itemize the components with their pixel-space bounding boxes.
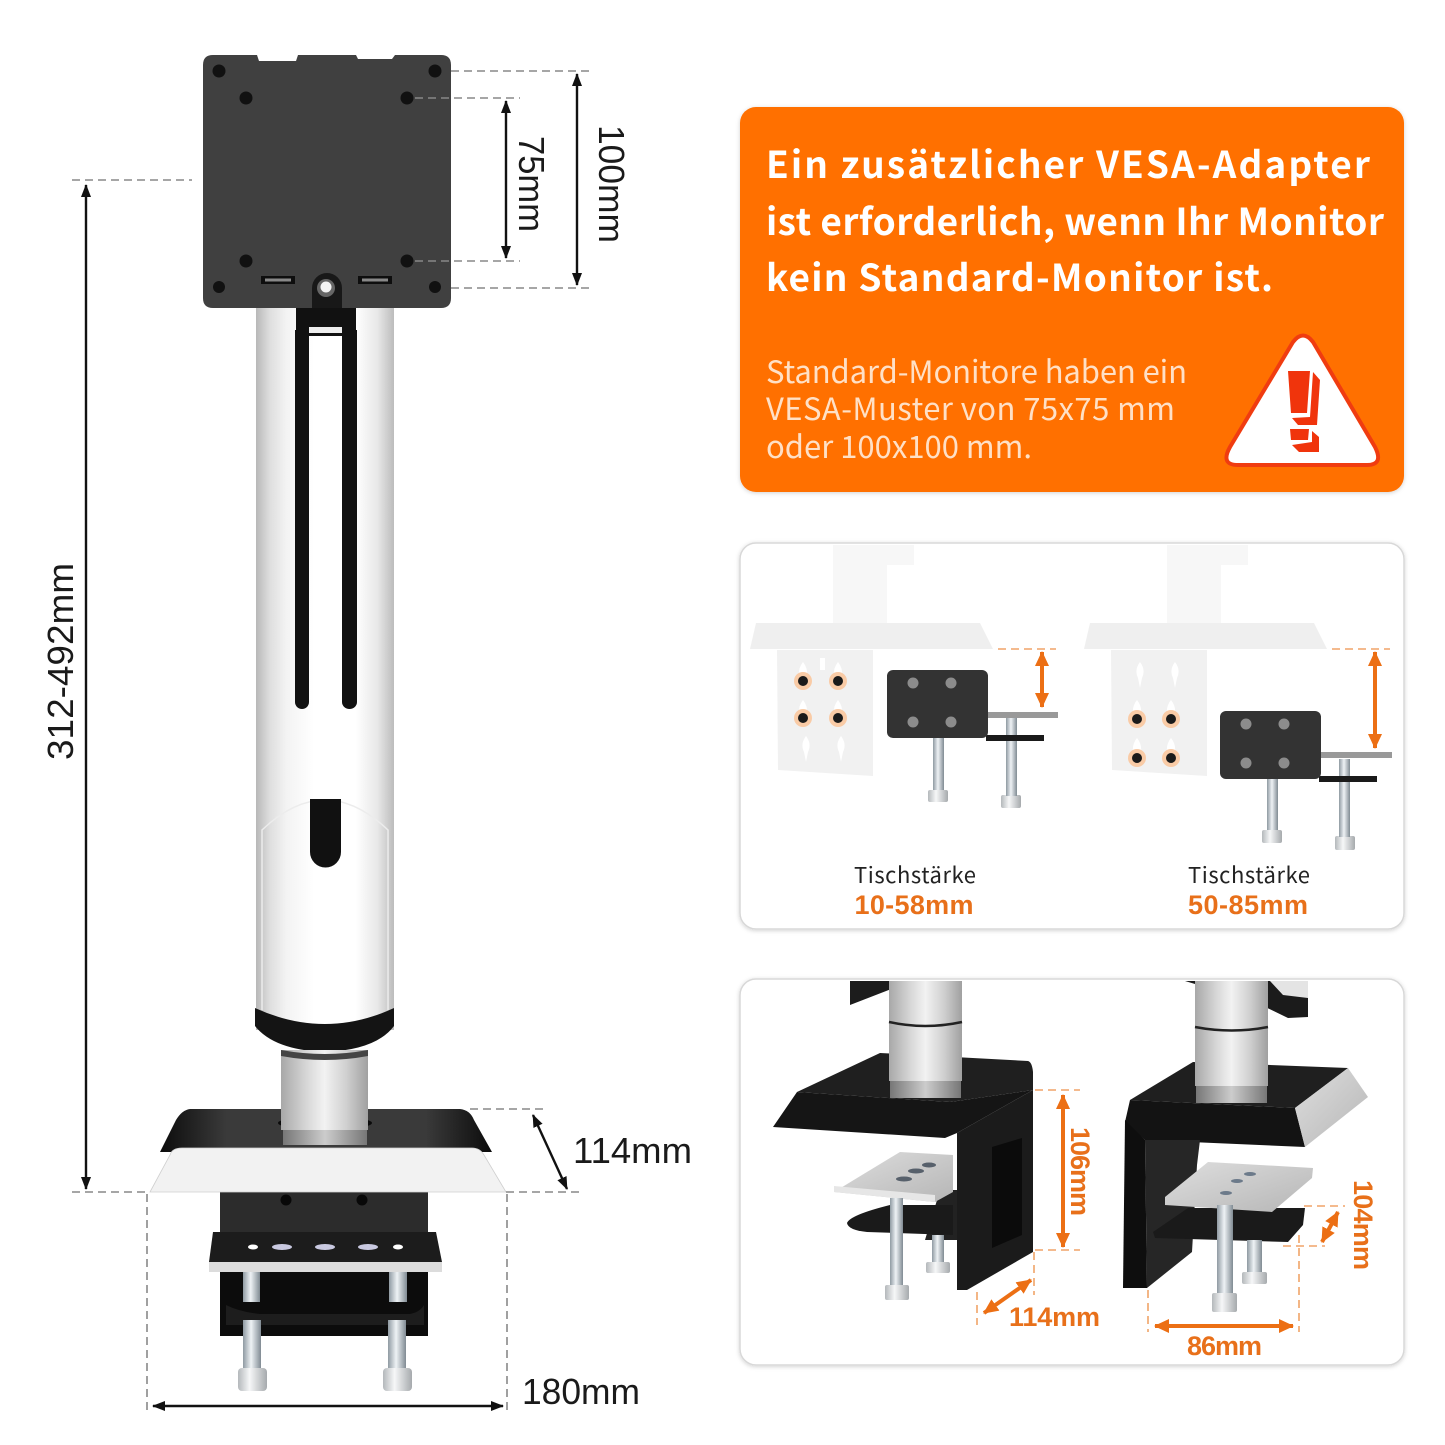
lower pole foot: [278, 1095, 372, 1145]
clamp screws: [238, 1272, 412, 1391]
cable hole: [310, 799, 341, 867]
icon: warning triangle: [1226, 336, 1378, 465]
clamp left view: [773, 981, 1033, 1300]
dimension: 100mm: [451, 71, 632, 288]
heading: Ein zusätzlicher VESA-Adapter: [766, 135, 1371, 189]
base clamp: [150, 1095, 506, 1391]
dimension 114mm: [977, 1252, 1100, 1332]
ghost mount right: [1084, 545, 1327, 776]
panel: table thickness: [740, 543, 1404, 929]
label 50-85mm: Tischstärke: [1188, 858, 1310, 890]
ghost mount left: [750, 545, 993, 776]
height adjustment slots: [295, 306, 357, 709]
black collar: [255, 1008, 394, 1052]
dimension 86mm: 86mm: [1187, 1331, 1262, 1361]
dimension: 114mm: [470, 1109, 692, 1192]
dimension: height 312-492mm: 312-492mm: [40, 563, 81, 760]
pivot: [312, 273, 342, 308]
body text: oder 100x100 mm.: [766, 422, 1032, 467]
clamp right view: [1123, 981, 1368, 1312]
dimension: 180mm: 180mm: [522, 1371, 640, 1412]
body text: [766, 347, 1187, 467]
panel: clamp dimensions: [740, 979, 1404, 1365]
dimension 86mm: [1148, 1235, 1299, 1361]
panel: VESA adapter notice: [740, 107, 1404, 492]
thickness arrow large: [1332, 649, 1390, 748]
column tube: [256, 300, 394, 1030]
dimension: 75mm: 75mm: [511, 136, 552, 232]
body text: VESA-Muster von 75x75 mm: [766, 384, 1175, 429]
lower black plate: [226, 1305, 424, 1325]
monitor mount column: [255, 300, 394, 1132]
dimension 106mm: [1035, 1090, 1095, 1250]
label 50-85mm: [1188, 858, 1310, 920]
dimension 104mm: 104mm: [1348, 1180, 1378, 1270]
clamp back plate: [220, 1190, 428, 1336]
dimension 104mm: [1283, 1180, 1378, 1270]
dimension: 180mm: [147, 1194, 640, 1414]
dimension: 100mm: 100mm: [591, 125, 632, 243]
white base front: [150, 1148, 506, 1192]
black base top: [160, 1109, 492, 1152]
black clamp large: [1220, 711, 1392, 850]
VESA plate: [203, 55, 451, 308]
black clamp small: [887, 670, 1058, 808]
label 10-58mm: Tischstärke: [854, 858, 976, 890]
dimension 106mm: 106mm: [1065, 1127, 1095, 1216]
heading: ist erforderlich, wenn Ihr Monitor: [766, 192, 1385, 246]
dimension: height 312-492mm: [40, 180, 192, 1192]
mounting holes: [212, 64, 442, 293]
label 10-58mm: 10-58mm: [854, 890, 974, 920]
lower pole: [281, 1050, 368, 1132]
dimension 114mm: 114mm: [1009, 1302, 1100, 1332]
label 10-58mm: [854, 858, 976, 920]
dimension: 114mm: 114mm: [573, 1130, 692, 1171]
heading: [766, 135, 1385, 302]
strap slots: [261, 276, 392, 284]
clamp plate: [209, 1232, 442, 1272]
dimension: 75mm: [415, 98, 552, 261]
label 50-85mm: 50-85mm: [1188, 890, 1308, 920]
thickness arrow small: [998, 649, 1056, 707]
body text: Standard-Monitore haben ein: [766, 347, 1187, 392]
heading: kein Standard-Monitor ist.: [766, 248, 1273, 302]
